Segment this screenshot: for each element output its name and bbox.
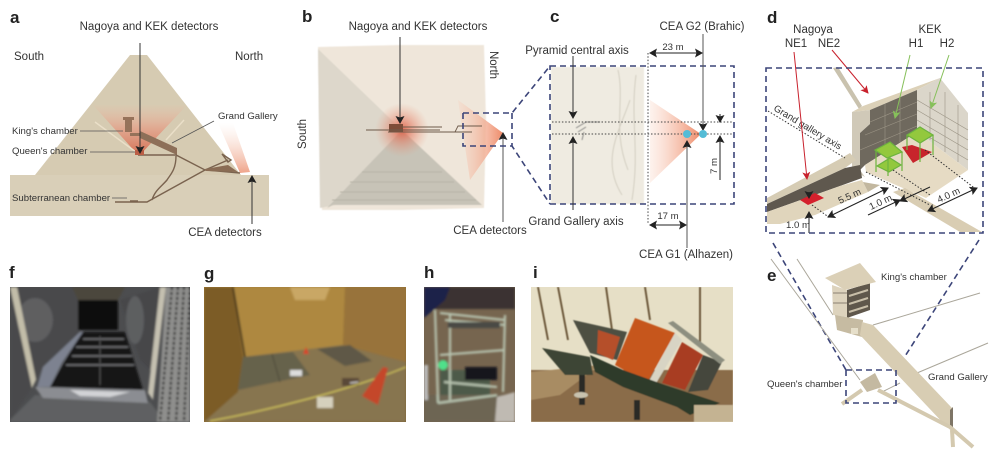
arrow: H1 — [895, 55, 910, 118]
3D room model — [767, 67, 982, 232]
detector glow — [375, 103, 429, 157]
dimension: 4.0 m — [928, 186, 977, 211]
gallery end wall — [950, 407, 953, 428]
label: Queen's chamber: Queen's chamber — [12, 146, 88, 157]
pyramid top surface — [318, 45, 486, 210]
dimension: 5.5 m — [828, 187, 888, 217]
label: NE2: NE2 — [818, 38, 840, 50]
Grand gallery axis dotted line — [768, 111, 845, 158]
panel c: north face detail — [525, 7, 745, 261]
zoom box — [550, 66, 734, 204]
label: KEK: KEK — [918, 24, 942, 36]
muon cone — [458, 100, 503, 180]
label: South: South — [297, 119, 309, 149]
dimension: 7 m — [709, 114, 720, 180]
label: H2: H2 — [940, 38, 954, 50]
label: Subterranean chamber: Subterranean chamber — [12, 193, 111, 204]
label: Grand Gallery: Grand Gallery — [928, 372, 988, 383]
dimension: 23 m: 23 m — [662, 42, 684, 53]
panel f: photo — [9, 263, 190, 422]
dimension: 4.0 m: 4.0 m — [936, 186, 962, 206]
King's chamber model — [825, 263, 876, 337]
label: CEA G1 (Alhazen): CEA G1 (Alhazen) — [639, 249, 733, 261]
label c: c — [550, 7, 559, 26]
zoom lines — [773, 240, 979, 372]
label f: f — [9, 263, 15, 282]
zoom box — [766, 68, 983, 233]
panel h: photo — [424, 263, 515, 422]
label: North: North — [235, 51, 263, 63]
arrow: from CEA detectors — [502, 133, 504, 222]
red detector NE1 — [800, 193, 824, 205]
panel e: chambers 3D model — [767, 240, 988, 447]
label: CEA detectors: CEA detectors — [453, 225, 527, 237]
photo i — [531, 287, 734, 422]
label b: b — [302, 7, 312, 26]
Grand Gallery passage — [140, 131, 177, 155]
arrow: to chambers — [399, 37, 401, 123]
label: CEA G2 (Brahic): CEA G2 (Brahic) — [660, 21, 745, 33]
zoom box — [463, 66, 550, 204]
arrow: gallery axis — [572, 137, 574, 210]
ground block — [10, 175, 269, 216]
label: King's chamber: King's chamber — [881, 272, 948, 283]
small zoom box — [846, 370, 896, 403]
dimension: 1.0 m left — [786, 192, 810, 233]
label e: e — [767, 266, 776, 285]
arrow: to CEA detectors — [251, 176, 253, 224]
photo h — [424, 287, 515, 422]
arrow: NE1 — [794, 52, 807, 179]
dimension: 1.0 m centre: 1.0 m — [868, 193, 894, 213]
heading: Nagoya and KEK detectors: Nagoya and KEK detectors — [349, 21, 488, 33]
arrow: H2 — [931, 55, 949, 108]
dimension: 23 m — [650, 42, 702, 53]
CEA access corridor — [205, 165, 238, 172]
panel d: Queen's chamber detector layout — [766, 8, 983, 233]
pyramid body — [35, 55, 241, 175]
dimension: 17 m — [650, 211, 686, 225]
leader lines — [80, 121, 214, 198]
muon view cone: CEA — [218, 123, 250, 173]
Grand Gallery model — [860, 322, 952, 428]
label h: h — [424, 263, 434, 282]
label g: g — [204, 264, 214, 283]
label: Pyramid central axis: Pyramid central axis — [525, 45, 629, 57]
label: Grand gallery axis: Grand gallery axis — [771, 103, 844, 152]
arrow: CEA G1 — [686, 141, 688, 248]
King's chamber — [123, 117, 140, 136]
dimension: 5.5 m: 5.5 m — [837, 187, 863, 207]
label: South: South — [14, 51, 44, 63]
dimension: 7 m: 7 m — [709, 158, 720, 174]
label: Grand Gallery axis: Grand Gallery axis — [528, 216, 624, 228]
label d: d — [767, 8, 777, 27]
Queen's chamber — [135, 150, 144, 155]
detector G1 — [683, 130, 691, 138]
panel a: pyramid cross-section — [10, 8, 278, 239]
panel g: photo — [204, 264, 406, 422]
label: King's chamber: King's chamber — [12, 126, 79, 137]
heading: Nagoya and KEK detectors: Nagoya and KEK detectors — [80, 21, 219, 33]
dimension: 1.0 m left: 1.0 m — [786, 220, 810, 231]
label i: i — [533, 263, 538, 282]
photo f — [10, 287, 190, 422]
panel b: pyramid top view — [297, 7, 550, 237]
label: Queen's chamber: Queen's chamber — [767, 379, 843, 390]
lower passage — [842, 390, 973, 447]
panel i: photo — [531, 263, 734, 422]
photo g — [204, 287, 406, 422]
dimension: 1.0 m centre — [868, 187, 930, 215]
muon view cone: Nagoya and KEK — [101, 113, 178, 156]
green table H1 — [875, 142, 902, 176]
detector G2 — [699, 130, 707, 138]
green table H2 — [907, 127, 933, 162]
muon cone — [650, 100, 701, 183]
arrow: to Nagoya and KEK detectors — [139, 43, 141, 153]
label: CEA detectors: CEA detectors — [188, 227, 262, 239]
passages — [115, 154, 240, 202]
arrow: CEA G2 — [702, 34, 704, 130]
arrow: NE2 — [832, 50, 868, 93]
red detector NE2 — [902, 145, 932, 163]
label: Nagoya: Nagoya — [793, 24, 833, 36]
face photo — [551, 67, 644, 204]
cone edges — [95, 120, 184, 152]
Queen's chamber model — [860, 373, 882, 392]
arrow: central axis — [572, 56, 574, 118]
label: Grand Gallery: Grand Gallery — [218, 111, 278, 122]
label: H1: H1 — [909, 38, 923, 50]
chambers plan — [366, 124, 482, 132]
air shaft lines — [771, 259, 988, 392]
label: North: North — [487, 51, 499, 79]
label a: a — [10, 8, 20, 27]
axis lines — [552, 53, 733, 224]
dimension: 17 m: 17 m — [657, 211, 679, 222]
label: NE1: NE1 — [785, 38, 807, 50]
dotted reference lines — [812, 150, 977, 218]
